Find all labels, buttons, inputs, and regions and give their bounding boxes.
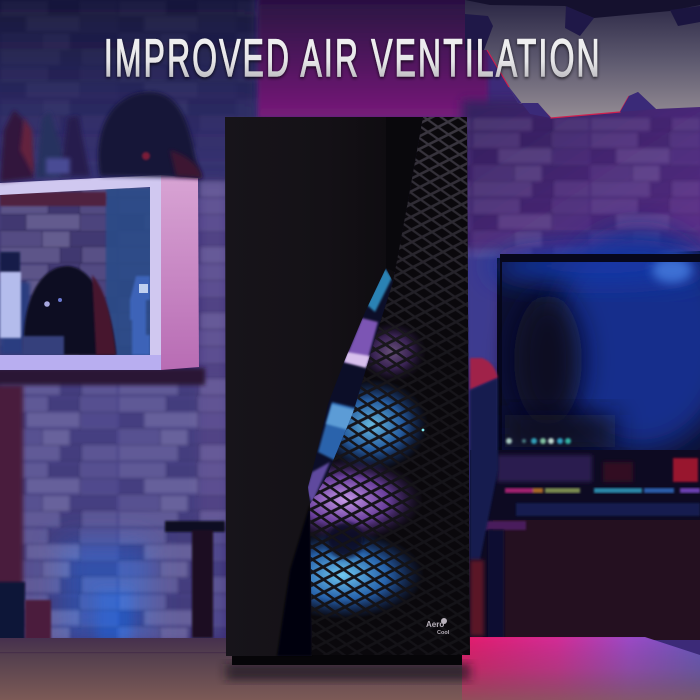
wooden desk surface — [0, 637, 700, 700]
shelf frame — [0, 175, 161, 370]
brand logo — [426, 618, 450, 636]
wall shelf with items — [0, 175, 199, 370]
panel fold shadow — [277, 504, 312, 656]
case mesh front panel — [310, 117, 470, 655]
fan light seen through slit — [308, 268, 393, 504]
gaming chair behind case — [470, 358, 498, 636]
case feet — [232, 652, 462, 665]
panel seam region — [386, 117, 423, 272]
gaming desk and RGB strip — [470, 450, 700, 640]
fan glow behind mesh — [310, 324, 426, 618]
helmet figure — [24, 266, 116, 355]
small LED — [422, 429, 424, 431]
stool on left — [165, 521, 225, 638]
title: IMPROVED AIR VENTILATION — [104, 29, 602, 88]
objects on top of shelf — [0, 92, 202, 182]
brand logo: Cool — [437, 630, 450, 636]
monitor on right — [490, 230, 700, 452]
hexagon wall lights — [465, 0, 700, 118]
PC case — [225, 110, 475, 665]
screen indicator dots — [506, 438, 571, 444]
brand logo: Aero — [426, 620, 444, 629]
case left front panel — [225, 117, 423, 656]
